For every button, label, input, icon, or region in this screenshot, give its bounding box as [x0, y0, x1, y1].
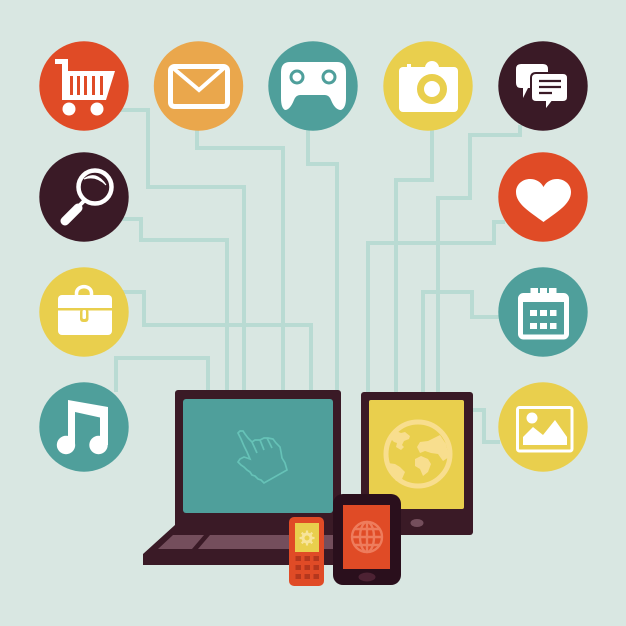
smartphone — [333, 494, 401, 585]
laptop lid — [175, 390, 341, 530]
icon: image — [498, 382, 588, 472]
line: heart to tablet — [368, 222, 505, 394]
icon: calendar — [498, 267, 588, 357]
line: mail to laptop — [197, 125, 283, 392]
tablet home button — [410, 519, 424, 527]
line: music to laptop — [116, 358, 208, 392]
icon: magnifying glass — [39, 152, 129, 242]
icon: chat bubbles — [498, 41, 588, 131]
icon: shopping cart — [39, 41, 129, 131]
laptop — [143, 390, 341, 565]
mobile phone — [289, 517, 324, 586]
laptop screen — [183, 399, 333, 513]
laptop base — [143, 525, 337, 565]
icon: music note — [39, 382, 129, 472]
line: search to laptop — [120, 219, 227, 392]
line: game to laptop — [308, 125, 337, 392]
connector lines — [116, 110, 520, 442]
line: calendar to tablet — [423, 292, 500, 394]
icon: camera — [383, 41, 473, 131]
line: briefcase to laptop — [120, 292, 311, 392]
icon: globe — [386, 422, 450, 486]
icon: hand cursor — [238, 431, 287, 483]
icon: web globe — [352, 522, 382, 552]
smartphone home button — [358, 572, 376, 582]
keyboard — [198, 535, 333, 549]
line: image to tablet — [470, 410, 500, 442]
mobile phone keypad — [296, 556, 319, 579]
tablet screen — [369, 400, 464, 509]
mobile phone screen — [295, 523, 319, 552]
line: cart to laptop — [120, 110, 244, 392]
icon: heart — [498, 152, 588, 242]
icon: mail — [154, 41, 243, 131]
icon: game controller — [268, 41, 358, 131]
smartphone screen — [343, 505, 390, 569]
line: chat to tablet — [438, 125, 520, 394]
line: camera to tablet — [396, 125, 432, 394]
tablet — [361, 392, 473, 535]
touchpad — [158, 535, 204, 549]
icon: briefcase — [39, 267, 129, 357]
icon: gear — [300, 530, 314, 546]
